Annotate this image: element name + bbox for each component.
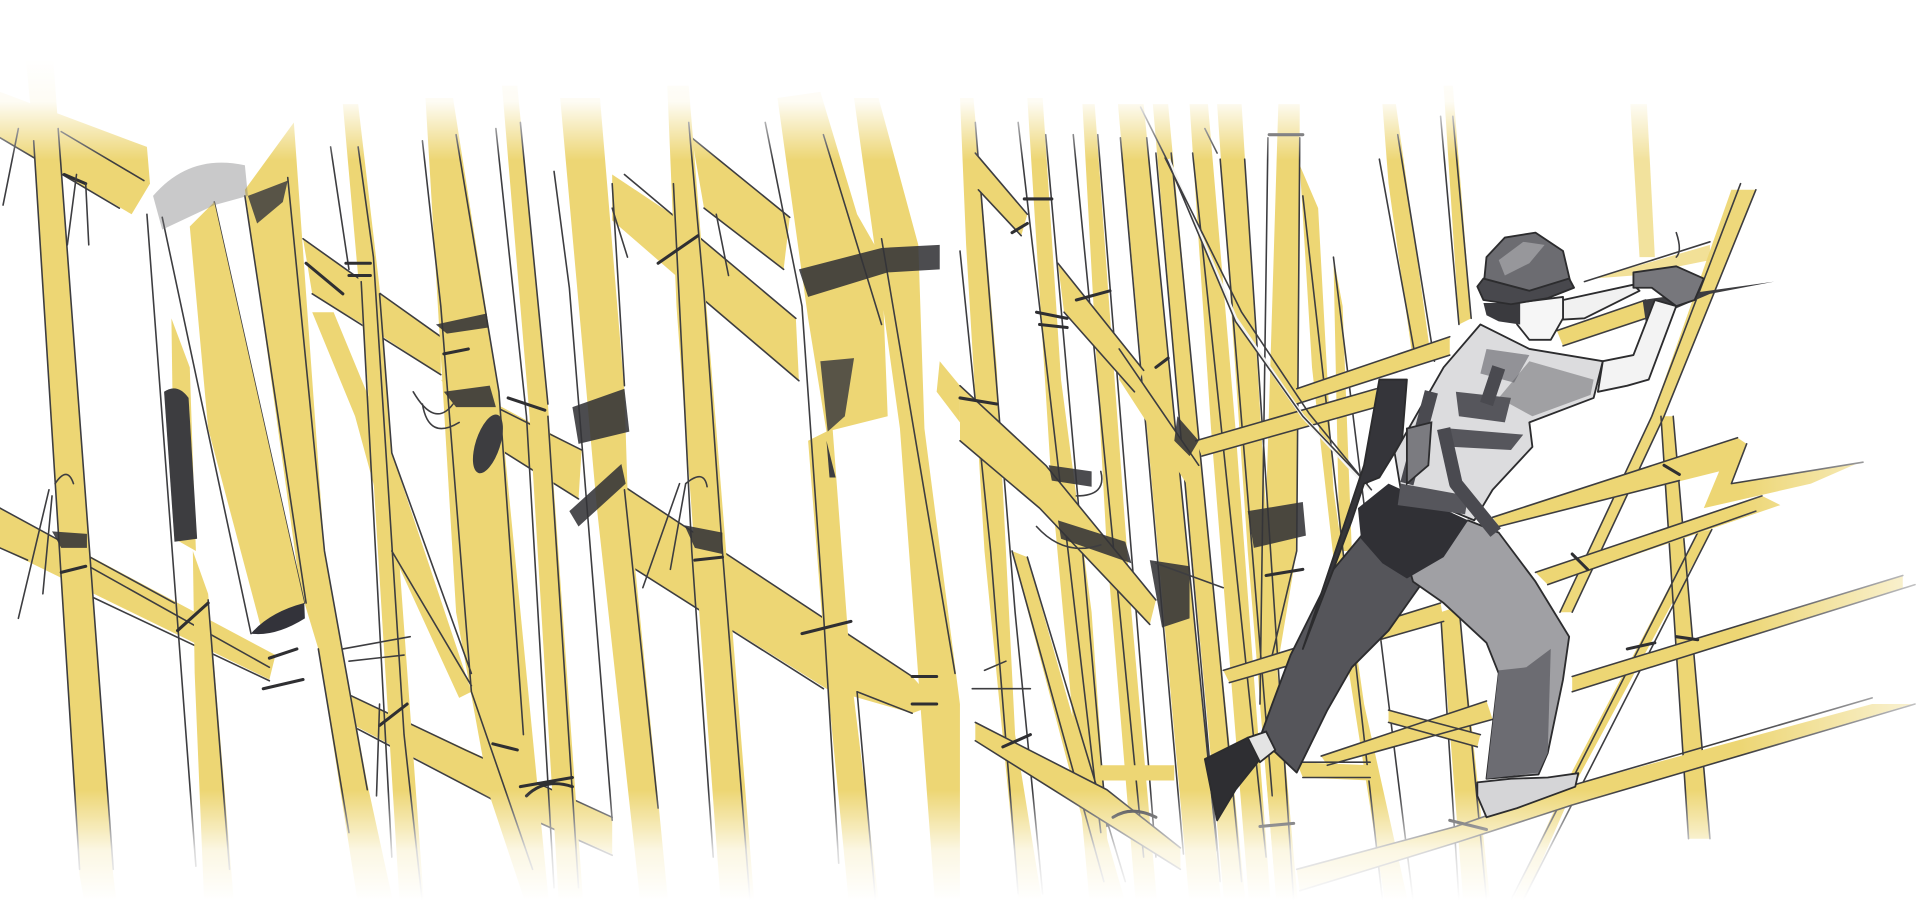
hair xyxy=(1483,303,1520,324)
harness buckle xyxy=(1407,422,1431,484)
light front trouser leg xyxy=(1401,520,1569,779)
vertical bamboo poles, right xyxy=(960,86,1756,920)
left scaffold section xyxy=(0,43,960,920)
glove xyxy=(1633,266,1704,306)
hard hat xyxy=(1477,233,1574,304)
vertical bamboo poles, left xyxy=(24,43,960,920)
horizontal and diagonal bamboo beams, left xyxy=(0,92,960,855)
bamboo tube end and shading xyxy=(467,358,854,478)
right scaffold section xyxy=(960,86,1915,920)
rope lashings, right xyxy=(960,129,1698,830)
large cut bamboo tube xyxy=(153,163,305,634)
ankle sock xyxy=(1248,732,1275,762)
horizontal and diagonal bamboo beams, right xyxy=(960,153,1915,891)
safety rope xyxy=(1141,107,1371,490)
rear forearm xyxy=(1563,285,1640,320)
trouser shadow xyxy=(1486,649,1551,779)
front arm xyxy=(1598,300,1676,392)
rear shoe xyxy=(1205,732,1266,820)
face and neck xyxy=(1514,297,1563,340)
shirt xyxy=(1395,324,1603,520)
harness straps xyxy=(1407,367,1499,533)
waist shadow xyxy=(1358,484,1468,579)
shirt stripes and shading xyxy=(1398,349,1594,514)
cable bundle on the back xyxy=(1303,380,1407,649)
dark rear trouser leg xyxy=(1260,533,1425,773)
rope lashings, left xyxy=(3,129,940,796)
worker in safety harness xyxy=(1205,233,1704,820)
front work shoe xyxy=(1477,773,1578,817)
